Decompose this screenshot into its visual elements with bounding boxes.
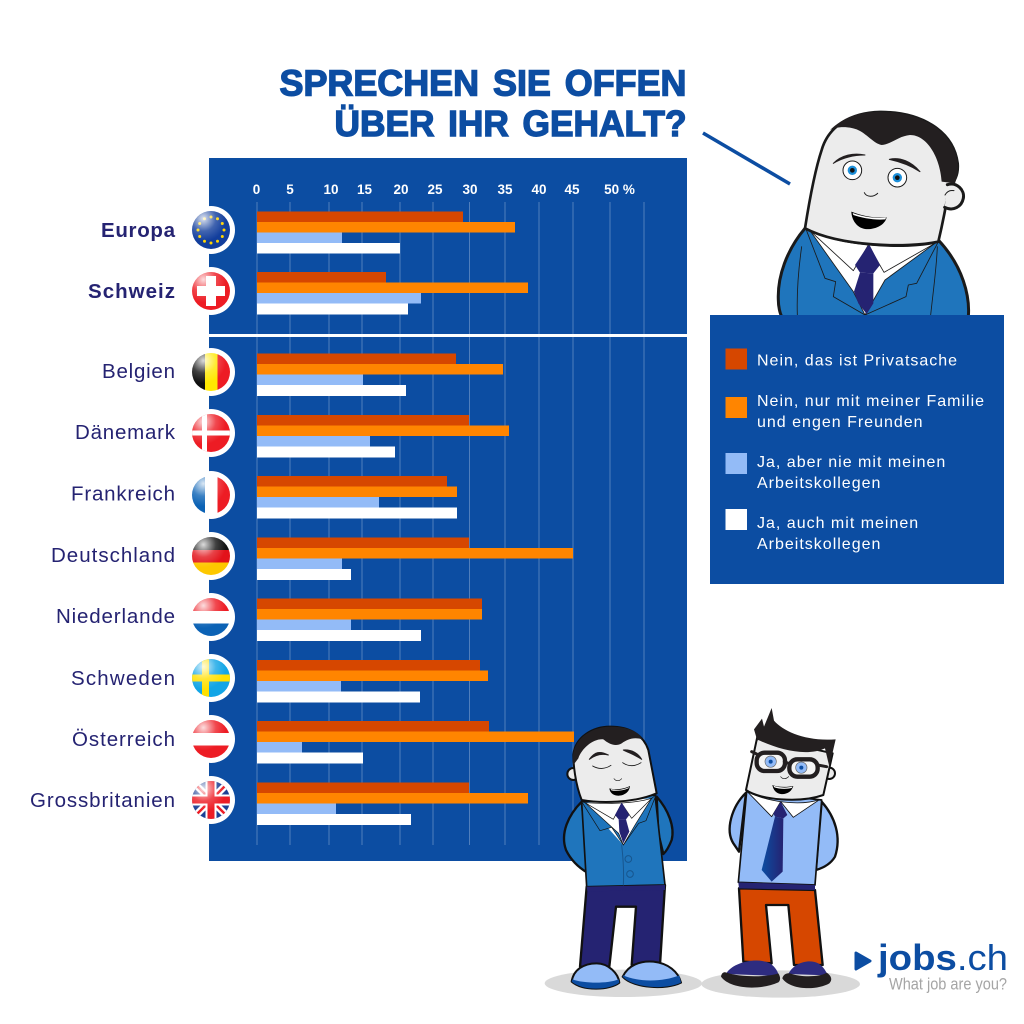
grid lines and axis: 15 <box>357 182 372 197</box>
legend item: Familie und Freunde: Nein, nur mit meiner Familie <box>757 393 985 410</box>
title <box>280 62 686 144</box>
logo tagline: What job are you? <box>889 974 1007 994</box>
icon: flag Niederlande <box>193 593 235 641</box>
country labels: Österreich <box>72 728 175 751</box>
legend item: auch Arbeitskollegen: Arbeitskollegen <box>757 536 881 553</box>
bar chart panel <box>209 158 687 861</box>
grid lines and axis: 0 <box>253 182 260 197</box>
icon: flag Europa <box>187 206 235 254</box>
grid lines and axis: 25 <box>427 182 443 197</box>
title: ÜBER IHR GEHALT? <box>334 103 686 144</box>
country labels: Schweden <box>71 667 175 690</box>
icon: flag Belgien <box>192 348 235 396</box>
legend item: nie Arbeitskollegen: Ja, aber nie mit meinen <box>757 454 946 471</box>
bars: Schweiz <box>257 272 528 314</box>
grid lines and axis: 50 % <box>604 182 635 197</box>
bars: Deutschland <box>257 538 573 580</box>
country labels: Europa <box>101 219 176 242</box>
legend item: auch Arbeitskollegen: Ja, auch mit meinen <box>757 515 919 532</box>
bars: Dänemark <box>257 415 509 458</box>
icon: flag Dänemark <box>192 409 235 457</box>
grid lines and axis: 10 <box>323 182 339 197</box>
grid lines and axis: 20 <box>393 182 409 197</box>
country labels: Deutschland <box>51 544 175 567</box>
legend item: nie Arbeitskollegen: Arbeitskollegen <box>757 475 881 492</box>
legend item: Privatsache: Nein, das ist Privatsache <box>757 352 958 370</box>
country labels: Schweiz <box>88 280 175 303</box>
legend item: Familie und Freunde: und engen Freunden <box>757 414 924 431</box>
country labels: Belgien <box>102 360 175 383</box>
bars: Österreich <box>257 721 574 764</box>
title: SPRECHEN SIE OFFEN <box>280 62 686 104</box>
icon: flag Frankreich <box>192 471 235 519</box>
icon: play triangle <box>856 953 870 969</box>
logo: jobs.ch <box>856 937 1008 994</box>
bars: Schweden <box>257 660 488 702</box>
bars: Grossbritanien <box>257 782 528 825</box>
icon: flag Schweden <box>192 654 235 702</box>
character: man with closed eyes <box>545 727 702 997</box>
grid lines and axis: 40 <box>531 182 547 197</box>
icon: flag Deutschland <box>192 532 235 580</box>
grid lines and axis <box>253 182 644 845</box>
icon: flag Grossbritanien <box>192 776 235 824</box>
bars: Belgien <box>257 354 503 396</box>
bars: Niederlande <box>257 598 482 641</box>
logo wordmark: jobs.ch <box>877 937 1008 978</box>
grid lines and axis: 5 <box>286 182 294 197</box>
grid lines and axis: 30 <box>462 182 478 197</box>
character: speaking man in suit <box>778 112 969 317</box>
legend item: auch Arbeitskollegen <box>726 509 919 553</box>
country labels: Dänemark <box>75 421 176 444</box>
character: man with glasses <box>701 708 860 998</box>
country labels: Frankreich <box>71 482 175 506</box>
bars: Frankreich <box>257 476 457 518</box>
country labels: Niederlande <box>56 605 175 628</box>
grid lines and axis: 45 <box>564 182 580 197</box>
legend item: Familie und Freunde <box>726 393 985 431</box>
icon: flag Schweiz <box>187 267 235 315</box>
country labels <box>30 219 176 812</box>
bars: Europa <box>257 212 515 254</box>
country labels: Grossbritanien <box>30 789 175 812</box>
legend item: nie Arbeitskollegen <box>726 453 946 492</box>
icon: flag Österreich <box>193 715 235 763</box>
legend panel <box>710 315 1004 584</box>
speech pointer line <box>703 133 790 184</box>
grid lines and axis: 35 <box>497 182 513 197</box>
legend item: Privatsache <box>726 348 958 370</box>
